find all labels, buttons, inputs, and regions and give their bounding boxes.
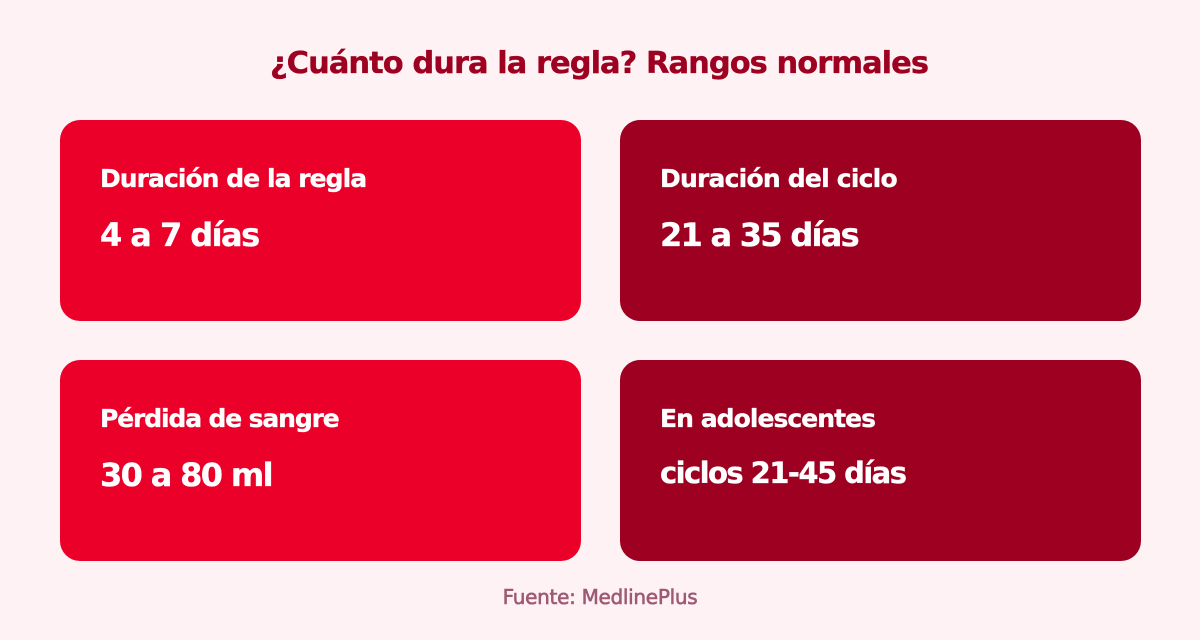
title: ¿Cuánto dura la regla? Rangos normales (270, 46, 928, 81)
label: duración del ciclo: Duración del ciclo (660, 164, 897, 193)
panel: duración de la regla (60, 120, 581, 321)
value: 30 a 80 ml: 30 a 80 ml (100, 456, 272, 494)
label: pérdida de sangre: Pérdida de sangre (100, 404, 339, 433)
source note: Fuente: MedlinePlus (503, 585, 697, 609)
panel: en adolescentes (620, 360, 1141, 561)
label: duración de la regla: Duración de la regla (100, 164, 366, 193)
label: en adolescentes: En adolescentes (660, 404, 875, 433)
panel: duración del ciclo (620, 120, 1141, 321)
panel: pérdida de sangre (60, 360, 581, 561)
value: ciclos 21-45 días: ciclos 21-45 días (660, 456, 905, 490)
value: 4 a 7 días: 4 a 7 días (100, 216, 259, 254)
value: 21 a 35 días: 21 a 35 días (660, 216, 858, 254)
